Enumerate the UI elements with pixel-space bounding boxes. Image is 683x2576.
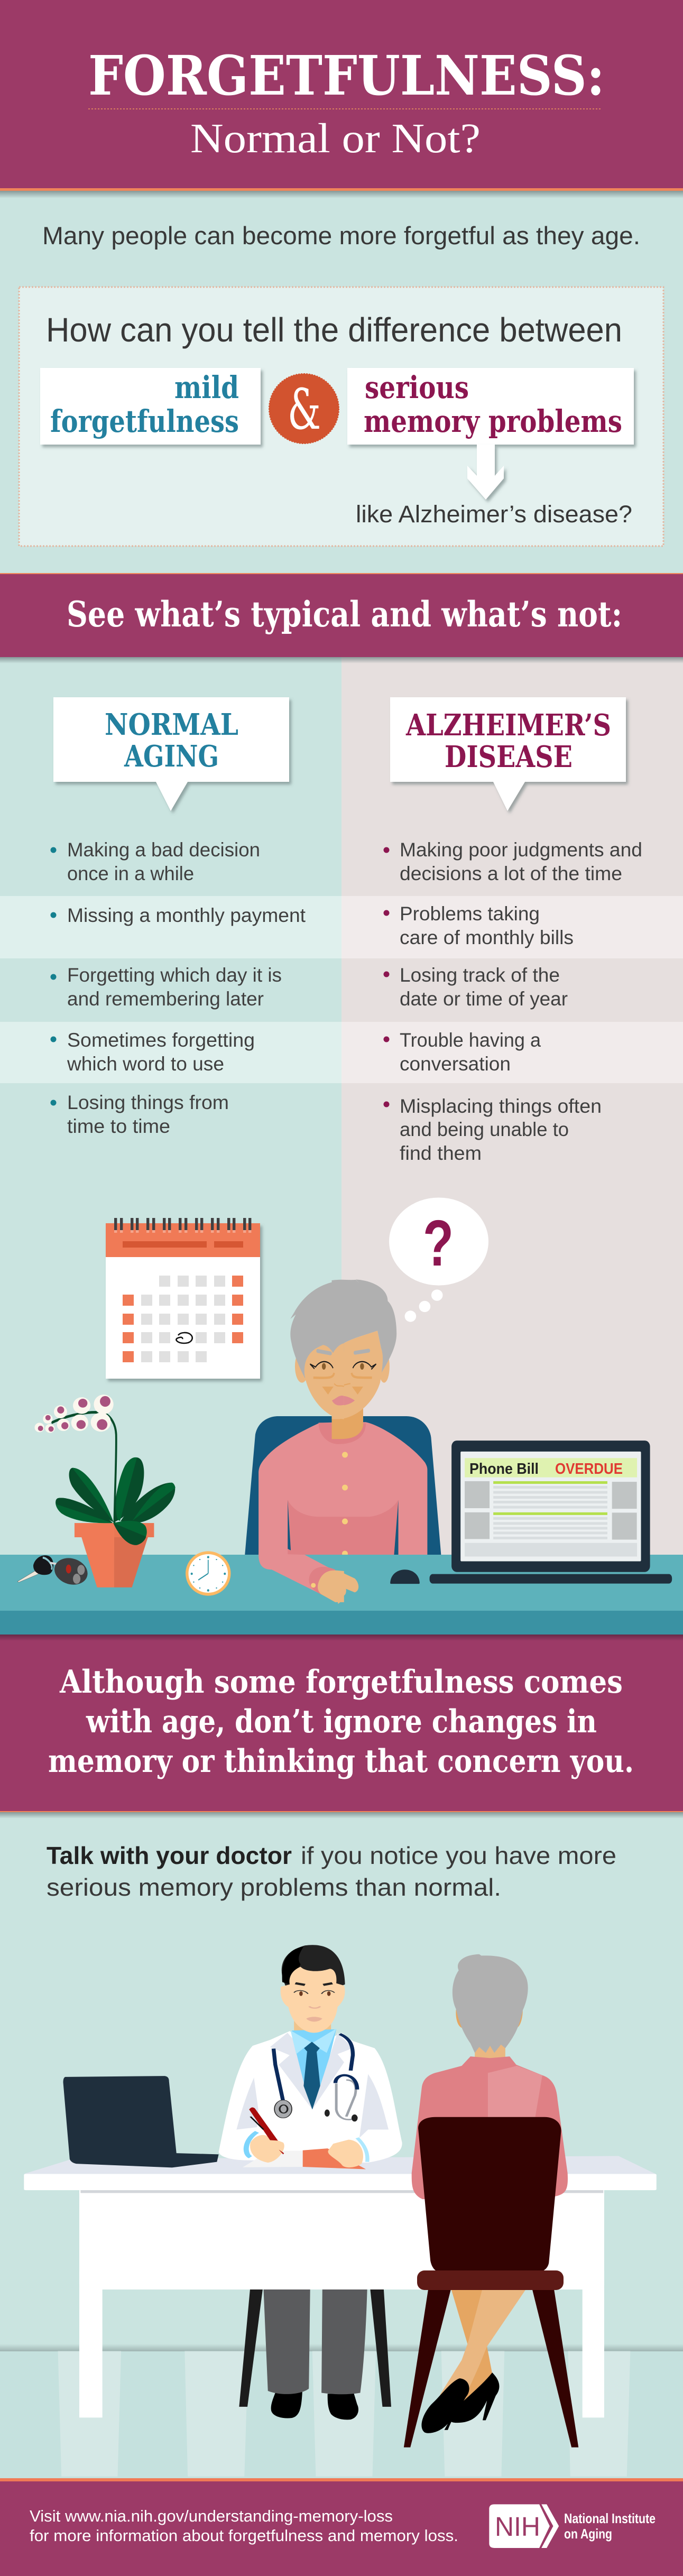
- label: serious memory problems: memory problems: [364, 403, 622, 439]
- list: alzheimer's disease: date or time of year: [400, 988, 568, 1010]
- list: normal aging: once in a while: [67, 863, 194, 884]
- list: alzheimer's disease: and being unable to: [400, 1119, 569, 1140]
- callout: normal aging: [53, 697, 289, 811]
- list: normal aging: Sometimes forgetting: [67, 1029, 255, 1051]
- icon: laptop with overdue phone bill: [430, 1441, 672, 1584]
- icon: desk clock: [186, 1551, 230, 1596]
- list: alzheimer's disease: Misplacing things often: [400, 1095, 602, 1117]
- table: [24, 2156, 657, 2417]
- panel: question box: [19, 287, 663, 546]
- chair back: [245, 1416, 441, 1556]
- icon: thought bubble: ?: [423, 1207, 454, 1280]
- section banner: [0, 573, 683, 663]
- label: serious memory problems: [347, 368, 634, 445]
- panel: footer: [0, 2478, 683, 2576]
- illustration: desk and woman at laptop: [0, 1197, 683, 1635]
- callout: normal aging: NORMAL: [105, 707, 238, 742]
- woman: torso: [259, 1422, 427, 1556]
- text: talk with your doctor: [47, 1842, 616, 1901]
- icon: ampersand circle: [269, 374, 339, 444]
- label: mild forgetfulness: [40, 368, 261, 445]
- text: like Alzheimer's disease: like Alzheimer’s disease?: [356, 501, 632, 528]
- header panel: [0, 0, 683, 198]
- callout: normal aging: AGING: [124, 739, 219, 774]
- list: alzheimer's disease: Problems taking: [400, 903, 540, 925]
- icon: wall calendar: [106, 1218, 260, 1379]
- background: upper teal section: [0, 188, 683, 579]
- laptop text: phone bill: Phone Bill: [469, 1461, 539, 1478]
- floor: [0, 2344, 683, 2478]
- desk: [0, 1555, 683, 1635]
- list: normal aging: Missing a monthly payment: [67, 904, 306, 926]
- advice text: Although some forgetfulness comes: [59, 1664, 623, 1701]
- icon: car keys: [17, 1555, 89, 1587]
- footer text: Visit www.nia.nih.gov/understanding-memory-loss: [30, 2507, 393, 2525]
- list: normal aging: and remembering later: [67, 988, 264, 1010]
- list: normal aging: Forgetting which day it is: [67, 964, 282, 986]
- lower teal wall: [0, 1812, 683, 2479]
- icon: ampersand circle: &: [288, 377, 321, 442]
- logo: NIH National Institute on Aging: on Aging: [564, 2526, 612, 2542]
- woman: head: [290, 1279, 396, 1439]
- panel: advice banner: [0, 1635, 683, 1812]
- list: alzheimer's disease: conversation: [400, 1053, 511, 1075]
- text: talk with your doctor: serious memory problems than normal.: [47, 1873, 501, 1901]
- illustration: doctor visit: [24, 1945, 657, 2448]
- doctor: legs and stool: [239, 2289, 391, 2420]
- title: FORGETFULNESS:: [88, 44, 605, 108]
- text: talk with your doctor: Talk with your doctor: [47, 1842, 292, 1869]
- patient seen from behind: [412, 1954, 568, 2199]
- label: mild forgetfulness: forgetfulness: [50, 403, 239, 439]
- icon: potted orchid: [34, 1395, 176, 1587]
- list: normal aging: time to time: [67, 1115, 170, 1137]
- callout: alzheimer's disease: DISEASE: [445, 740, 573, 774]
- footer text: [30, 2507, 458, 2545]
- advice text: [48, 1664, 634, 1780]
- footer text: for more information about forgetfulness and memory loss.: [30, 2526, 458, 2545]
- text: talk with your doctor: if you notice you have more: [301, 1842, 616, 1869]
- list: normal aging: [51, 839, 306, 1137]
- icon: closed laptop: [63, 2076, 219, 2167]
- columns background: [0, 657, 683, 1635]
- shadow below advice banner: [0, 1812, 683, 1818]
- subtitle: Normal or Not?: [190, 116, 481, 162]
- label: mild forgetfulness: mild: [174, 370, 239, 405]
- list: alzheimer's disease: Making poor judgments and: [400, 839, 642, 861]
- list: normal aging: Losing things from: [67, 1092, 229, 1113]
- panel: alzheimer's column: [384, 697, 642, 1164]
- callout: alzheimer's disease: ALZHEIMER’S: [405, 708, 611, 743]
- panel: normal aging column: [51, 697, 306, 1137]
- list: normal aging: Making a bad decision: [67, 839, 260, 861]
- doctor: upper body: [219, 1945, 402, 2169]
- list: alzheimer's disease: Trouble having a: [400, 1029, 541, 1051]
- advice text: with age, don’t ignore changes in: [86, 1703, 597, 1740]
- logo: NIH National Institute on Aging: [489, 2504, 656, 2548]
- list: normal aging: which word to use: [67, 1053, 224, 1075]
- callout: alzheimer's disease: [390, 697, 626, 811]
- logo: NIH National Institute on Aging: National Institute: [564, 2510, 656, 2526]
- patient legs and shoes: [421, 2289, 526, 2433]
- list: alzheimer's disease: [384, 839, 642, 1164]
- intro sentence: Many people can become more forgetful as they age.: [42, 221, 640, 250]
- icon: thought bubble: [389, 1197, 488, 1322]
- label: serious memory problems: serious: [365, 370, 469, 405]
- list: alzheimer's disease: find them: [400, 1142, 482, 1164]
- arrow down: [467, 445, 504, 500]
- list: alzheimer's disease: Losing track of the: [400, 964, 560, 986]
- logo: NIH National Institute on Aging: NIH: [495, 2512, 540, 2542]
- list: alzheimer's disease: decisions a lot of the time: [400, 863, 622, 884]
- woman: arm and hand: [259, 1553, 358, 1604]
- patient chair: [404, 2117, 578, 2448]
- question text: How can you tell the difference between: [46, 311, 622, 349]
- list: alzheimer's disease: care of monthly bills: [400, 927, 574, 948]
- laptop text: overdue: OVERDUE: [555, 1461, 623, 1478]
- icon: mouse: [390, 1569, 420, 1584]
